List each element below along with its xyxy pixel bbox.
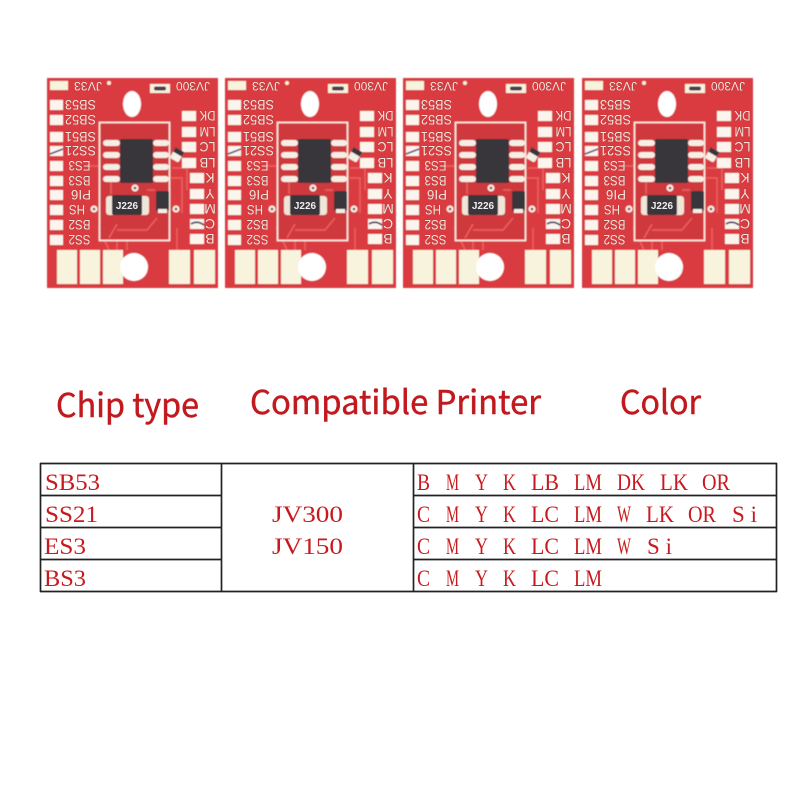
chip type: BS3: BS3 xyxy=(44,566,86,591)
chip photo 4: LC xyxy=(734,139,750,155)
printer: JV150: JV150 xyxy=(272,534,343,559)
colors: ES3 xyxy=(417,534,672,559)
chip photo 3: K xyxy=(561,170,571,186)
chip photo 2: C xyxy=(383,216,393,232)
colors: SB53: B xyxy=(417,470,430,495)
chip photo 1: DK xyxy=(199,108,216,124)
compatibility table xyxy=(40,463,777,592)
chip photo 2: PI6 xyxy=(249,187,269,203)
chip photo 1: JV300 xyxy=(176,79,210,93)
chip photo 2: ES3 xyxy=(246,158,268,174)
chip photo 3: Y xyxy=(561,186,571,202)
chip photo 4: BS3 xyxy=(603,173,626,189)
colors: SS21: W xyxy=(617,502,631,527)
chip photo 3: JV300 xyxy=(532,79,566,93)
colors: ES3: K xyxy=(503,534,516,559)
chip photo 2: LC xyxy=(378,139,394,155)
colors: SS21: Si xyxy=(732,502,757,527)
chip photo 1: K xyxy=(205,170,215,186)
chip photo 1: C xyxy=(205,216,215,232)
chip photo 3: B xyxy=(561,231,571,247)
chip photo 3: SS21 xyxy=(421,143,452,159)
colors: SB53: Y xyxy=(475,470,488,495)
chip photo 4 xyxy=(582,78,753,288)
chip type: SB53: SB53 xyxy=(45,470,100,495)
chip photo 3: PI6 xyxy=(427,187,447,203)
chip photo 3: LB xyxy=(556,155,572,171)
chip photo 2: M xyxy=(382,201,394,217)
colors: ES3: LC xyxy=(531,534,559,559)
colors: ES3: LM xyxy=(574,534,602,559)
colors: BS3 xyxy=(417,566,602,591)
colors: SS21: LC xyxy=(531,502,559,527)
chip photo 3: ES3 xyxy=(424,158,446,174)
colors: BS3: C xyxy=(417,566,430,591)
chip photo 2 xyxy=(225,78,396,288)
chip photo 2: SB51 xyxy=(243,129,274,145)
chip photo 1: HS xyxy=(69,202,85,218)
chip photo 3: J226 xyxy=(472,201,495,212)
chip photo 4: BS2 xyxy=(603,217,626,233)
colors: SB53: K xyxy=(503,470,516,495)
chip photo 4: SS2 xyxy=(603,232,626,248)
colors: SS21: M xyxy=(446,502,459,527)
chip photo 1: LC xyxy=(200,139,216,155)
chip photo 3: M xyxy=(560,201,572,217)
heading: compatible printer: Compatible Printer xyxy=(250,376,541,424)
colors: SB53: DK xyxy=(617,470,645,495)
colors: SS21: Y xyxy=(475,502,488,527)
colors: ES3: Y xyxy=(475,534,488,559)
chip photo 2: B xyxy=(383,231,393,247)
chip photo 3: C xyxy=(561,216,571,232)
chip photo 3: BS3 xyxy=(424,173,446,189)
chip photo 4: DK xyxy=(734,108,750,124)
chip photo 4: C xyxy=(740,216,750,232)
chip photo 4: K xyxy=(740,170,750,186)
chip photo 1: M xyxy=(204,201,216,217)
colors: ES3: Si xyxy=(647,534,672,559)
chip photo 1: SB51 xyxy=(65,129,96,145)
chip photo 3: SB51 xyxy=(421,129,452,145)
colors: SS21: K xyxy=(503,502,516,527)
chip photo 2: BS3 xyxy=(246,173,268,189)
chip photo 4: HS xyxy=(604,202,620,218)
chip photo 2: JV300 xyxy=(354,79,388,93)
chip photo 3: LM xyxy=(556,124,572,140)
chip photo 4: LM xyxy=(734,124,750,140)
chip photo 4: SB53 xyxy=(600,97,631,113)
chip photo 2: SS21 xyxy=(243,143,274,159)
colors: ES3: M xyxy=(446,534,459,559)
chip photo 3: SS2 xyxy=(424,232,446,248)
chip photo 2: Y xyxy=(383,186,393,202)
chip photo 1: BS2 xyxy=(68,217,90,233)
colors: SS21: OR xyxy=(688,502,717,527)
chip photo 3: LC xyxy=(556,139,572,155)
chip photo 3: HS xyxy=(425,202,441,218)
chip photo 1: J226 xyxy=(116,201,139,212)
chip photo 2: LM xyxy=(378,124,394,140)
chip photo 1 xyxy=(47,78,218,288)
chip type: SS21: SS21 xyxy=(45,502,98,527)
chip photo 2: HS xyxy=(247,202,263,218)
chip photo 4: B xyxy=(740,231,750,247)
chip photo 1: PI6 xyxy=(71,187,91,203)
chip photo 2: K xyxy=(383,170,393,186)
chip photo 1: ES3 xyxy=(68,158,90,174)
chip photo 2: LB xyxy=(378,155,394,171)
chip photo 1: SS21 xyxy=(65,143,96,159)
chip photo 4: M xyxy=(739,201,751,217)
chip photo 3: DK xyxy=(555,108,572,124)
chip photo 4: JV33 xyxy=(609,79,637,93)
chip photo 3 xyxy=(403,78,574,288)
chip photo 3: BS2 xyxy=(424,217,446,233)
printer: JV300: JV300 xyxy=(272,502,343,527)
chip photo 4: LB xyxy=(734,155,750,171)
chip photo 4: J226 xyxy=(651,201,674,212)
chip photo 1: LB xyxy=(200,155,216,171)
chip photo 2: JV33 xyxy=(252,79,280,93)
chip photo 4: ES3 xyxy=(603,158,626,174)
chip photo 4: JV300 xyxy=(711,79,745,93)
colors: SS21: LK xyxy=(646,502,674,527)
chip photo 4: PI6 xyxy=(606,187,626,203)
colors: BS3: LM xyxy=(574,566,602,591)
chip photo 1: BS3 xyxy=(68,173,90,189)
chip photo 2: SB53 xyxy=(243,97,274,113)
colors: ES3: C xyxy=(417,534,430,559)
chip photo 3: SB53 xyxy=(421,97,452,113)
chip photo 3: SB52 xyxy=(421,112,452,128)
colors: SB53: M xyxy=(446,470,459,495)
colors: BS3: M xyxy=(446,566,459,591)
chip photo 4: SB51 xyxy=(600,129,631,145)
colors: SS21 xyxy=(417,502,757,527)
table grid xyxy=(40,463,777,592)
chip photo 2: SS2 xyxy=(246,232,268,248)
chip photo 1: LM xyxy=(200,124,216,140)
chip photo 1: SB53 xyxy=(65,97,96,113)
colors: SS21: LM xyxy=(574,502,602,527)
colors: SB53: OR xyxy=(702,470,731,495)
colors: BS3: K xyxy=(503,566,516,591)
colors: SB53: LM xyxy=(574,470,602,495)
chip photo 2: DK xyxy=(377,108,394,124)
chip photo 2: BS2 xyxy=(246,217,268,233)
heading: chip type: Chip type xyxy=(56,379,199,427)
heading: color: Color xyxy=(620,376,701,424)
colors: SS21: C xyxy=(417,502,430,527)
colors: SB53 xyxy=(417,470,731,495)
chip photo 1: SB52 xyxy=(65,112,96,128)
chip photo 2: J226 xyxy=(294,201,317,212)
colors: SB53: LK xyxy=(660,470,688,495)
colors: BS3: LC xyxy=(531,566,559,591)
chip photo 4: SS21 xyxy=(600,143,631,159)
colors: BS3: Y xyxy=(475,566,488,591)
chip photo 4: Y xyxy=(740,186,750,202)
chip photo 1: SS2 xyxy=(68,232,90,248)
chip photo 4: SB52 xyxy=(600,112,631,128)
chip photo 1: B xyxy=(205,231,215,247)
chip photo 1: JV33 xyxy=(74,79,102,93)
chip photo 3: JV33 xyxy=(430,79,458,93)
colors: SB53: LB xyxy=(531,470,559,495)
colors: ES3: W xyxy=(617,534,631,559)
chip photo 1: Y xyxy=(205,186,215,202)
chip type: ES3: ES3 xyxy=(44,534,86,559)
chip photo 2: SB52 xyxy=(243,112,274,128)
